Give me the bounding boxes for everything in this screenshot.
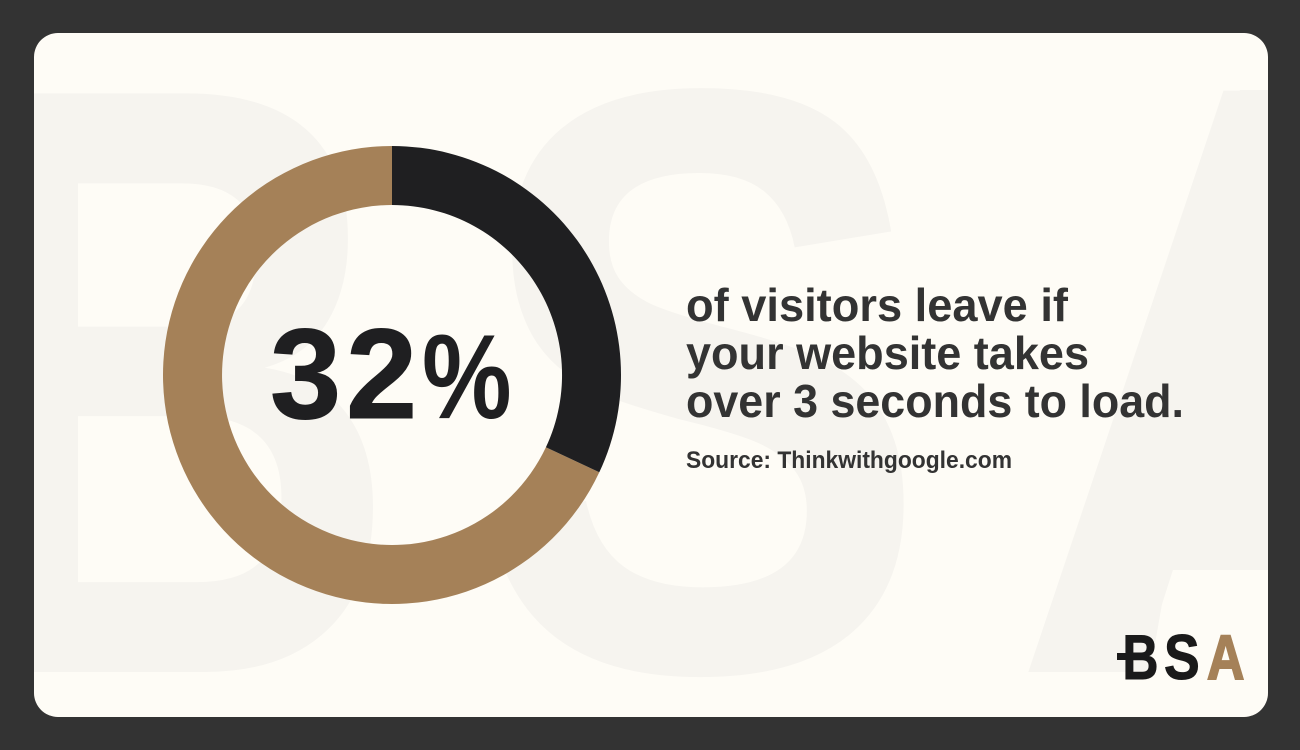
statement text: of visitors leave if: [686, 279, 1069, 331]
statement text: over 3 seconds to load.: [686, 375, 1184, 427]
big number: %: [422, 311, 512, 444]
logo: BSA: B: [1122, 624, 1158, 693]
logo: BSA: A: [1207, 623, 1244, 693]
donut chart: 32 percent: [163, 146, 621, 604]
statement text: [686, 279, 1184, 427]
background watermark letters BSA: [164, 101, 1237, 667]
logo: BSA: [1117, 623, 1244, 693]
big number: [270, 303, 512, 446]
donut segment: 32 percent: [392, 146, 621, 472]
logo: BSA: S: [1164, 623, 1200, 693]
donut segment: remaining 68 percent: [163, 146, 599, 604]
big number: 32: [270, 303, 417, 446]
statement text: your website takes: [686, 327, 1089, 379]
source line: Source: Thinkwithgoogle.com: [686, 447, 1012, 474]
